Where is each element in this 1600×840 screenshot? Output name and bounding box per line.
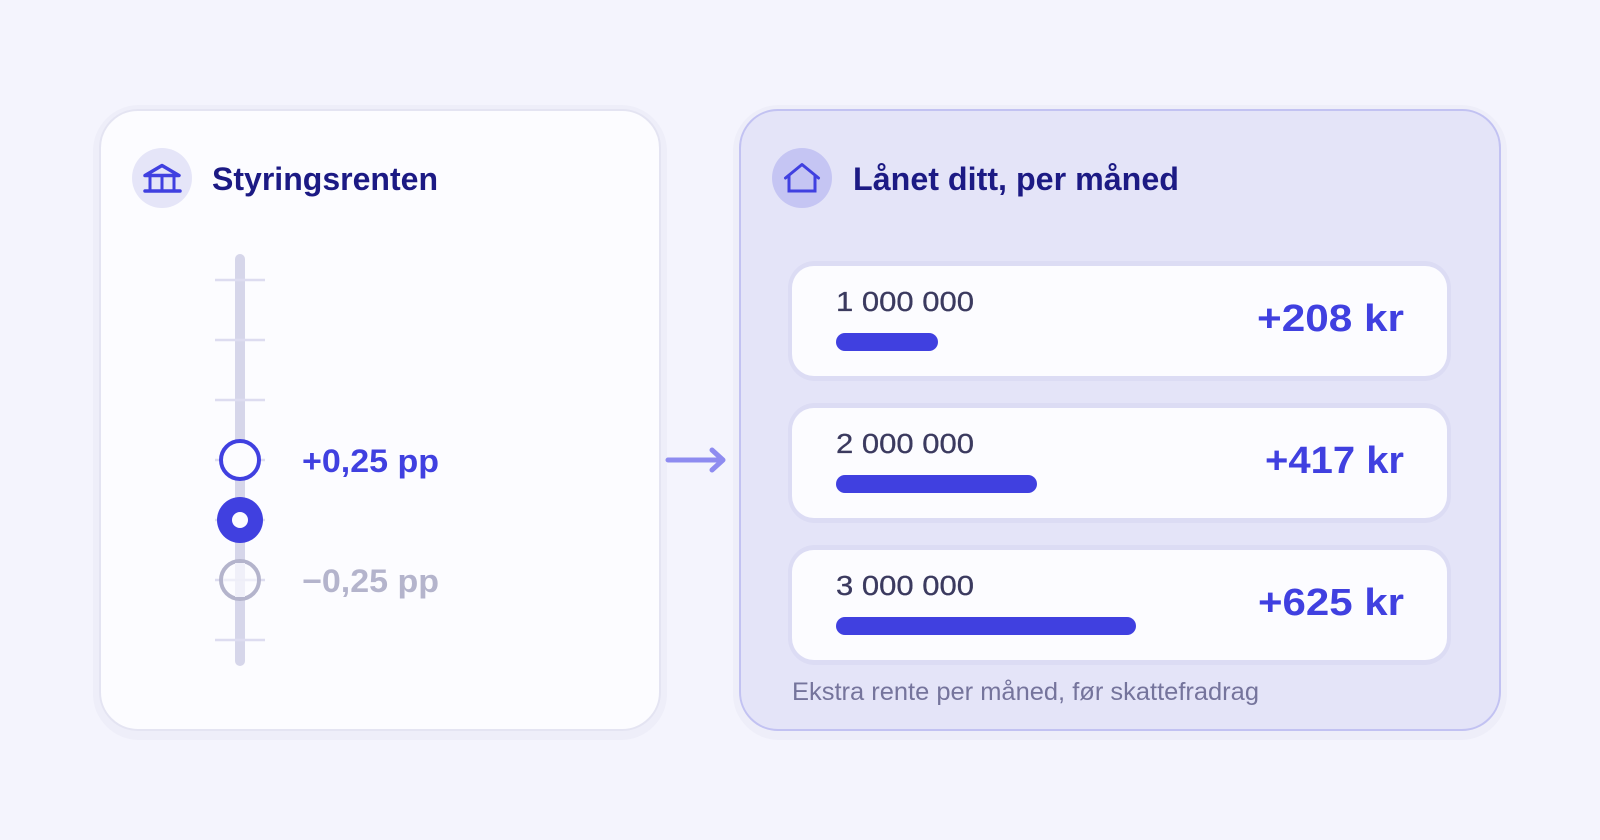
heading: Styringsrenten: Styringsrenten xyxy=(212,161,438,197)
footnote: Ekstra rente per måned, før skattefradrag xyxy=(792,678,1259,706)
loan amount: 2 000 000 xyxy=(836,428,974,459)
loan amount: 1 000 000 xyxy=(836,286,974,317)
bar xyxy=(836,333,938,351)
rate scale xyxy=(215,254,265,666)
icon: house xyxy=(772,148,832,208)
row: 1 000 000 xyxy=(788,261,1451,381)
value: +208 kr xyxy=(1257,298,1404,340)
marker: current rate xyxy=(217,497,263,543)
panel: Lånet ditt, per måned xyxy=(733,105,1507,740)
value: +417 kr xyxy=(1265,440,1404,482)
arrow xyxy=(668,450,723,470)
loan amount: 3 000 000 xyxy=(836,570,974,601)
icon: bank xyxy=(132,148,192,208)
label: +0,25 pp: +0,25 pp xyxy=(302,443,439,479)
bar xyxy=(836,475,1037,493)
row: 3 000 000 xyxy=(788,545,1451,665)
marker: plus 0,25 xyxy=(221,441,259,479)
bar xyxy=(836,617,1136,635)
heading: Lånet ditt, per måned: Lånet ditt, per måned xyxy=(853,161,1179,197)
value: +625 kr xyxy=(1258,582,1404,624)
marker: minus 0,25 xyxy=(221,561,259,599)
panel: Styringsrenten xyxy=(93,105,667,740)
row: 2 000 000 xyxy=(788,403,1451,523)
label: −0,25 pp: −0,25 pp xyxy=(302,563,439,599)
